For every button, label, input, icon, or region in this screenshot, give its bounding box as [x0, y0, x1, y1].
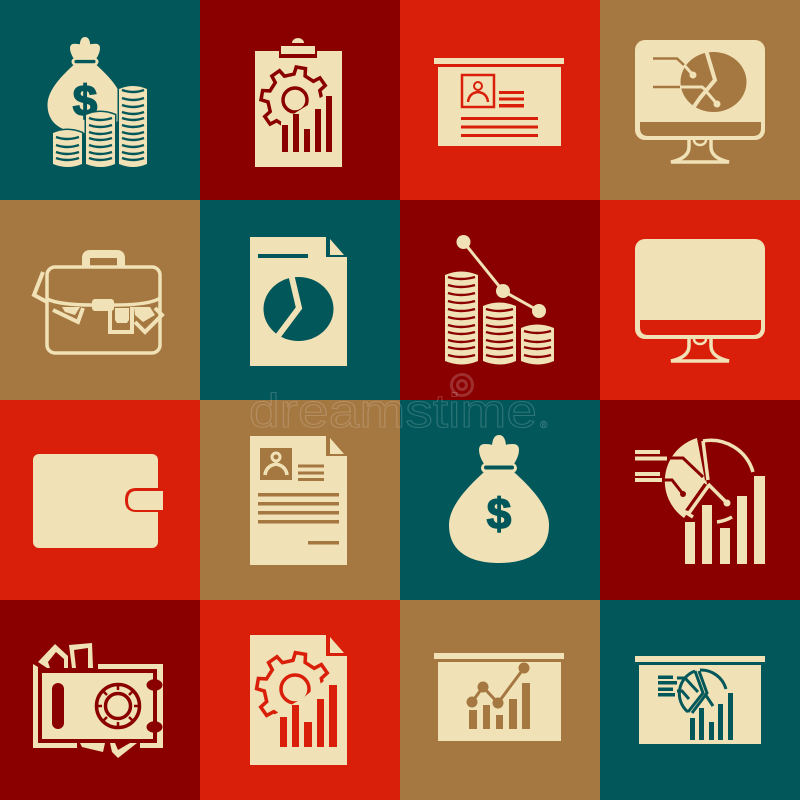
- panel: clipboard with gear: [200, 0, 400, 200]
- watermark: [249, 374, 548, 437]
- icon: pie chart: [635, 438, 753, 522]
- icon: resume: [250, 436, 347, 565]
- panel: resume document: [200, 400, 400, 600]
- pie chart outline: [677, 670, 726, 713]
- icon: clipboard: [255, 38, 342, 167]
- panel: money bag: [400, 400, 600, 600]
- icon: banknotes: [34, 272, 162, 332]
- icon: money bag: $: [487, 490, 511, 539]
- icon: board chart: [635, 656, 765, 744]
- icon: coin stacks: [445, 272, 554, 364]
- icon: dial: [96, 684, 140, 728]
- bar chart: [685, 476, 765, 564]
- panel: safe with money: [0, 600, 200, 800]
- line chart: [466, 662, 530, 708]
- panel: blank monitor: [600, 200, 800, 400]
- bar chart: [282, 96, 332, 152]
- bar chart: [280, 685, 337, 747]
- icon: briefcase: [34, 254, 162, 353]
- icon: gear: [251, 647, 345, 750]
- icon: monitor: [635, 40, 765, 162]
- panel: wallet: [0, 400, 200, 600]
- icon: money bag: [48, 37, 122, 133]
- panel: board with line and bars: [400, 600, 600, 800]
- bar chart: [690, 693, 733, 740]
- panel: falling coins chart: [400, 200, 600, 400]
- icon: money bag: [449, 435, 549, 563]
- pie chart: [653, 50, 746, 112]
- icon: coin stacks: [53, 86, 147, 167]
- icon: wallet: [33, 454, 163, 548]
- panel: document with gear and bars: [200, 600, 400, 800]
- panel: presentation board with profile: [400, 0, 600, 200]
- bar chart: [469, 683, 530, 729]
- panel: monitor with pie chart: [600, 0, 800, 200]
- icon: safe: [33, 643, 163, 758]
- icon: board chart: [434, 653, 564, 741]
- icon: gear: [256, 62, 340, 155]
- icon: document: [250, 237, 347, 366]
- watermark: dreamstime: [249, 384, 537, 437]
- icon: money bag: $: [73, 77, 97, 126]
- icon: trend line: [456, 235, 546, 318]
- panel: briefcase with money: [0, 200, 200, 400]
- icon: banknotes: [38, 643, 137, 758]
- icon: board profile: [434, 58, 564, 146]
- panel: document with pie chart: [200, 200, 400, 400]
- panel: board with pie and bars: [600, 600, 800, 800]
- icon: monitor: [635, 239, 765, 361]
- panel: money bag and coins: [0, 0, 200, 200]
- icon: document: [250, 635, 347, 765]
- panel: pie and bar chart: [600, 400, 800, 600]
- watermark: ®: [540, 420, 548, 431]
